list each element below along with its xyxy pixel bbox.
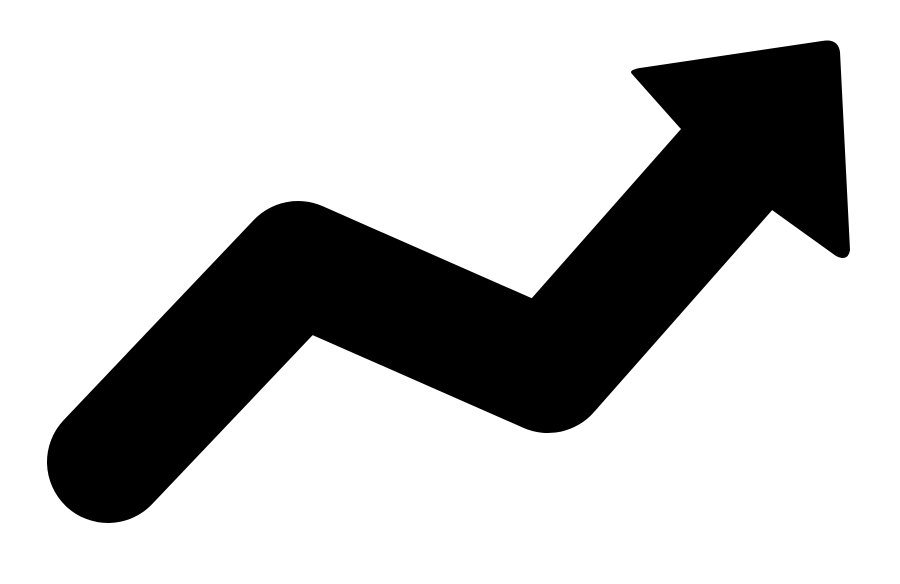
- arrow body: zigzag line: [108, 160, 735, 462]
- arrow head: [631, 40, 850, 258]
